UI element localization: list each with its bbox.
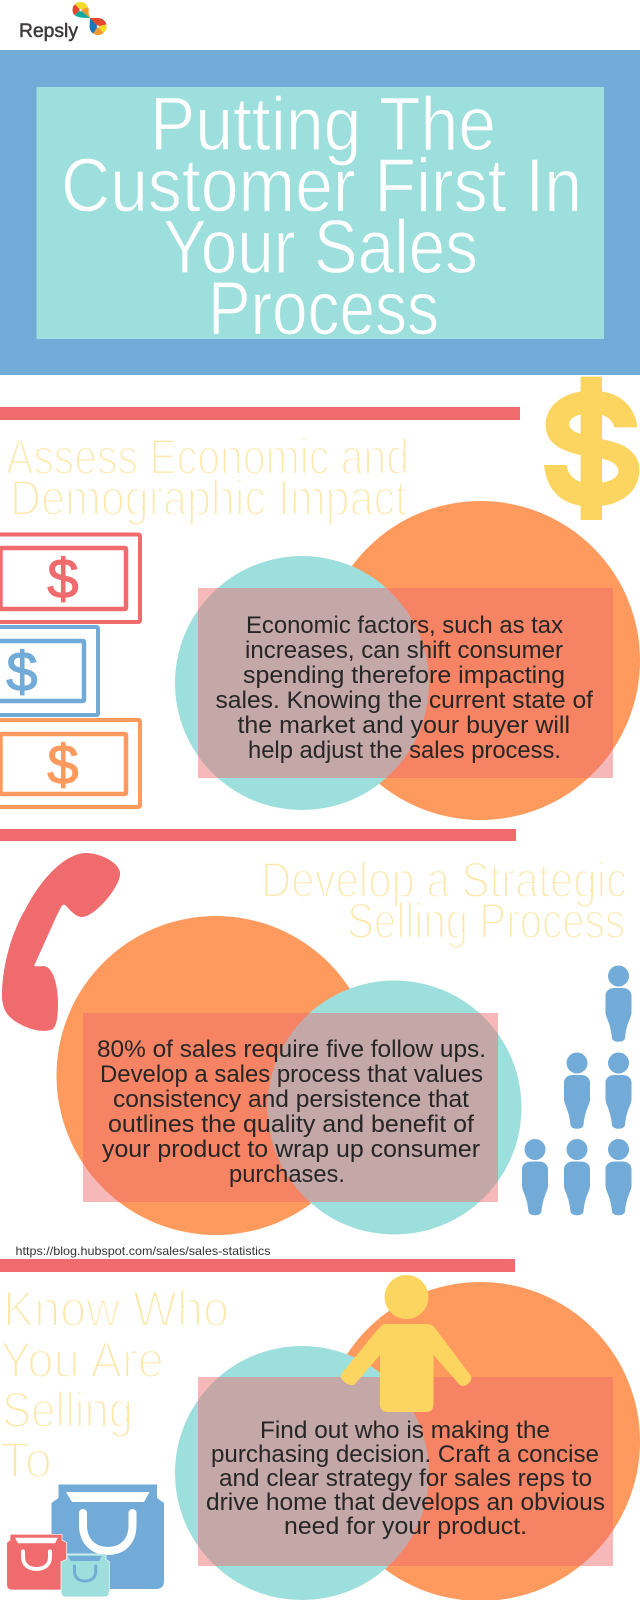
icon: orange banknote: $ [47,733,79,796]
small red bag [7,1534,67,1590]
icon: blue banknote: $ [6,640,38,703]
panel: selling process venn [56,916,522,1235]
section 3 heading: To [0,1432,52,1488]
icon: large dollar sign [544,377,639,520]
section 2 heading [261,852,627,949]
icon: red banknote: $ [47,547,79,610]
icon: telephone handset [2,853,120,1031]
text: follow ups: outlines the quality and benefit of [108,1111,474,1138]
title box [36,87,604,339]
section 2 divider bar [0,829,516,841]
section 3 heading [0,1281,229,1488]
icon: orange banknote [0,720,140,807]
section 3 heading: Know Who [3,1281,229,1337]
large blue bag [52,1484,164,1589]
source link: https://blog.hubspot.com/sales/sales-statistics [16,1244,270,1258]
section 1 heading: Demographic Impact [10,470,407,526]
icon: yellow person [341,1275,471,1412]
title: Putting The [150,82,496,167]
text: economic factors: Economic factors, such as tax [246,612,563,639]
title [61,82,582,352]
text: find out who: purchasing decision. Craft a concise [211,1441,599,1468]
text: find out who: need for your product. [284,1513,527,1540]
icon: shopping bags [7,1484,164,1597]
panel: economic impact venn [175,501,640,820]
section 1 heading: Assess Economic and [6,429,409,485]
text: economic factors [216,612,593,764]
text: follow ups [97,1036,486,1188]
section 3 divider bar [0,1259,515,1272]
section 1 divider bar [0,407,520,420]
text: economic factors: help adjust the sales process. [248,737,561,764]
section 3 heading: You Are [0,1332,164,1388]
text: find out who [206,1417,605,1540]
text: find out who: drive home that develops an obvious [206,1489,605,1516]
section 1 heading [6,429,409,526]
text: follow ups: purchases. [229,1161,345,1188]
icon: pyramid of people [522,966,632,1215]
text: follow ups: your product to wrap up consumer [102,1136,480,1163]
text: find out who: and clear strategy for sales reps to [219,1465,592,1492]
text: follow ups: consistency and persistence that [113,1086,469,1113]
section 3 heading: Selling [2,1382,133,1438]
logo: Repsly: Repsly [19,21,79,42]
logo: Repsly [19,2,107,42]
text: economic factors: the market and your buyer will [238,712,570,739]
header panel [0,50,640,375]
text: follow ups: 80% of sales require five follow ups. [97,1036,486,1063]
small teal bag [61,1554,109,1597]
icon: red banknote [0,534,140,622]
text: economic factors: spending therefore impacting [243,662,565,689]
text: economic factors: sales. Knowing the current state of [216,687,593,714]
panel: know your buyer venn [175,1282,640,1600]
title: Process [208,266,439,352]
text: economic factors: increases, can shift consumer [245,637,563,664]
title: Your Sales [163,205,478,290]
text: find out who: Find out who is making the [260,1417,550,1444]
text: follow ups: Develop a sales process that values [100,1061,483,1088]
title: Customer First In [61,144,582,228]
icon: blue banknote [0,627,98,715]
